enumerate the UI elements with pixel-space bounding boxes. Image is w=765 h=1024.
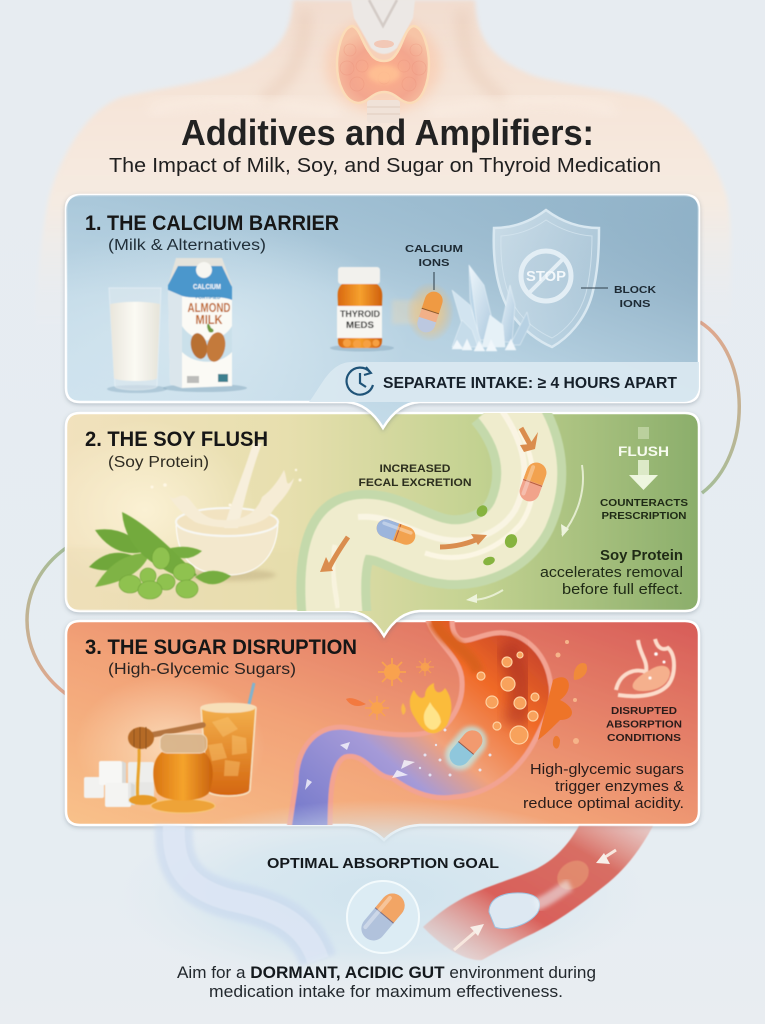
label: counteracts prescription: COUNTERACTS [600,497,688,509]
icon: thyroid meds bottle [330,267,394,352]
label: disrupted absorption conditions: DISRUPTED [611,705,677,717]
icon: capsule in stomach [443,723,490,772]
text: goal statement: medication intake for maximum effectiveness. [209,983,563,1001]
icon: flush arrow [618,427,669,490]
icon: thyroid meds bottle: THYROID [340,309,380,320]
panel 2 heading: 2. THE SOY FLUSH [85,427,268,451]
panel 1 heading: (Milk & Alternatives) [108,237,266,254]
icon: almond milk carton: MILK [196,312,223,327]
icon: honey jar [151,734,215,813]
label: increased fecal excretion: FECAL EXCRETION [358,477,472,489]
label: counteracts prescription: PRESCRIPTION [602,510,686,522]
text: soy explanation [540,547,683,598]
text: goal statement [177,964,596,1001]
heading: optimal absorption goal: OPTIMAL ABSORPTION GOAL [267,856,499,872]
icon: clock [347,367,373,395]
text: sugar explanation: trigger enzymes & [555,778,684,795]
text: separate intake: SEPARATE INTAKE: ≥ 4 HOURS APART [383,375,677,392]
text: soy explanation: accelerates removal [540,564,683,581]
text: sugar explanation [523,761,684,812]
label: disrupted absorption conditions [606,705,682,744]
icon: flush arrow: FLUSH [618,443,669,459]
panel: sugar disruption [66,615,699,840]
label: block ions: BLOCK [614,284,656,296]
icon: honey dipper [128,725,203,805]
icon: almond milk carton: CALCIUM [193,284,221,291]
label: block ions [581,284,656,310]
icon: capsule lower [376,519,416,545]
text: sugar explanation: High-glycemic sugars [530,761,684,778]
bottom goal section [113,800,653,1001]
panel 3 heading [85,635,357,678]
label: counteracts prescription [600,497,688,522]
label: disrupted absorption conditions: CONDITIONS [607,732,681,744]
label: increased fecal excretion [358,463,472,489]
text: goal statement: Aim for a DORMANT, ACIDIC GUT environment during [177,964,596,982]
icon: flames [401,683,451,733]
icon: almond milk carton [163,258,247,392]
icon: thyroid meds bottle: MEDS [346,320,374,331]
band: separate intake [309,362,699,402]
panel: soy flush [35,400,699,636]
icon: shield with stop sign [494,210,599,347]
panel 1 heading [85,211,339,254]
panel 2 heading [85,427,268,471]
red intestine with dissolving tablet [423,826,653,960]
connector arc: left [27,548,66,694]
icon: larynx and thyroid gland [325,0,441,123]
icon: capsule in bubble [347,881,419,953]
icon: capsule upper [520,462,546,502]
icon: calcium crystals [452,265,530,351]
panel 2 heading: (Soy Protein) [108,454,209,471]
icon: almond milk carton: FORTIFIED [196,295,221,301]
title: Additives and Amplifiers: [181,112,594,153]
icon: shield with stop sign: STOP [526,269,566,285]
body silhouette [34,0,732,340]
icon: edamame pods [89,512,231,599]
panel 3 heading: 3. THE SUGAR DISRUPTION [85,635,357,659]
blue intestine ribbon [174,826,318,960]
icon: sugar cubes [84,761,154,807]
icon: bowl of soy milk [150,443,302,581]
intestine illustration [333,400,583,620]
label: calcium ions [405,243,463,290]
panel 3 heading: (High-Glycemic Sugars) [108,661,296,678]
label: increased fecal excretion: INCREASED [380,463,451,475]
text: soy explanation: before full effect. [562,581,683,598]
text: sugar explanation: reduce optimal acidity. [523,795,684,812]
label: calcium ions: IONS [418,257,450,269]
panel 1 heading: 1. THE CALCIUM BARRIER [85,211,339,235]
text: soy explanation: Soy Protein [600,547,683,564]
label: calcium ions: CALCIUM [405,243,463,255]
label: block ions: IONS [620,298,650,310]
label: disrupted absorption conditions: ABSORPTION [606,718,682,730]
subtitle: The Impact of Milk, Soy, and Sugar on Thyroid Medication [109,154,661,177]
icon: germs [346,658,434,720]
panel: calcium barrier [10,195,699,440]
icon: almond milk carton: ALMOND [188,300,230,315]
icon: glowing capsule [392,282,454,342]
icon: iced tea glass [201,683,256,796]
connector arc: right [700,322,739,493]
icon: glass of milk [107,288,167,393]
stomach illustration [288,615,587,835]
icon: stomach outline [616,639,674,696]
